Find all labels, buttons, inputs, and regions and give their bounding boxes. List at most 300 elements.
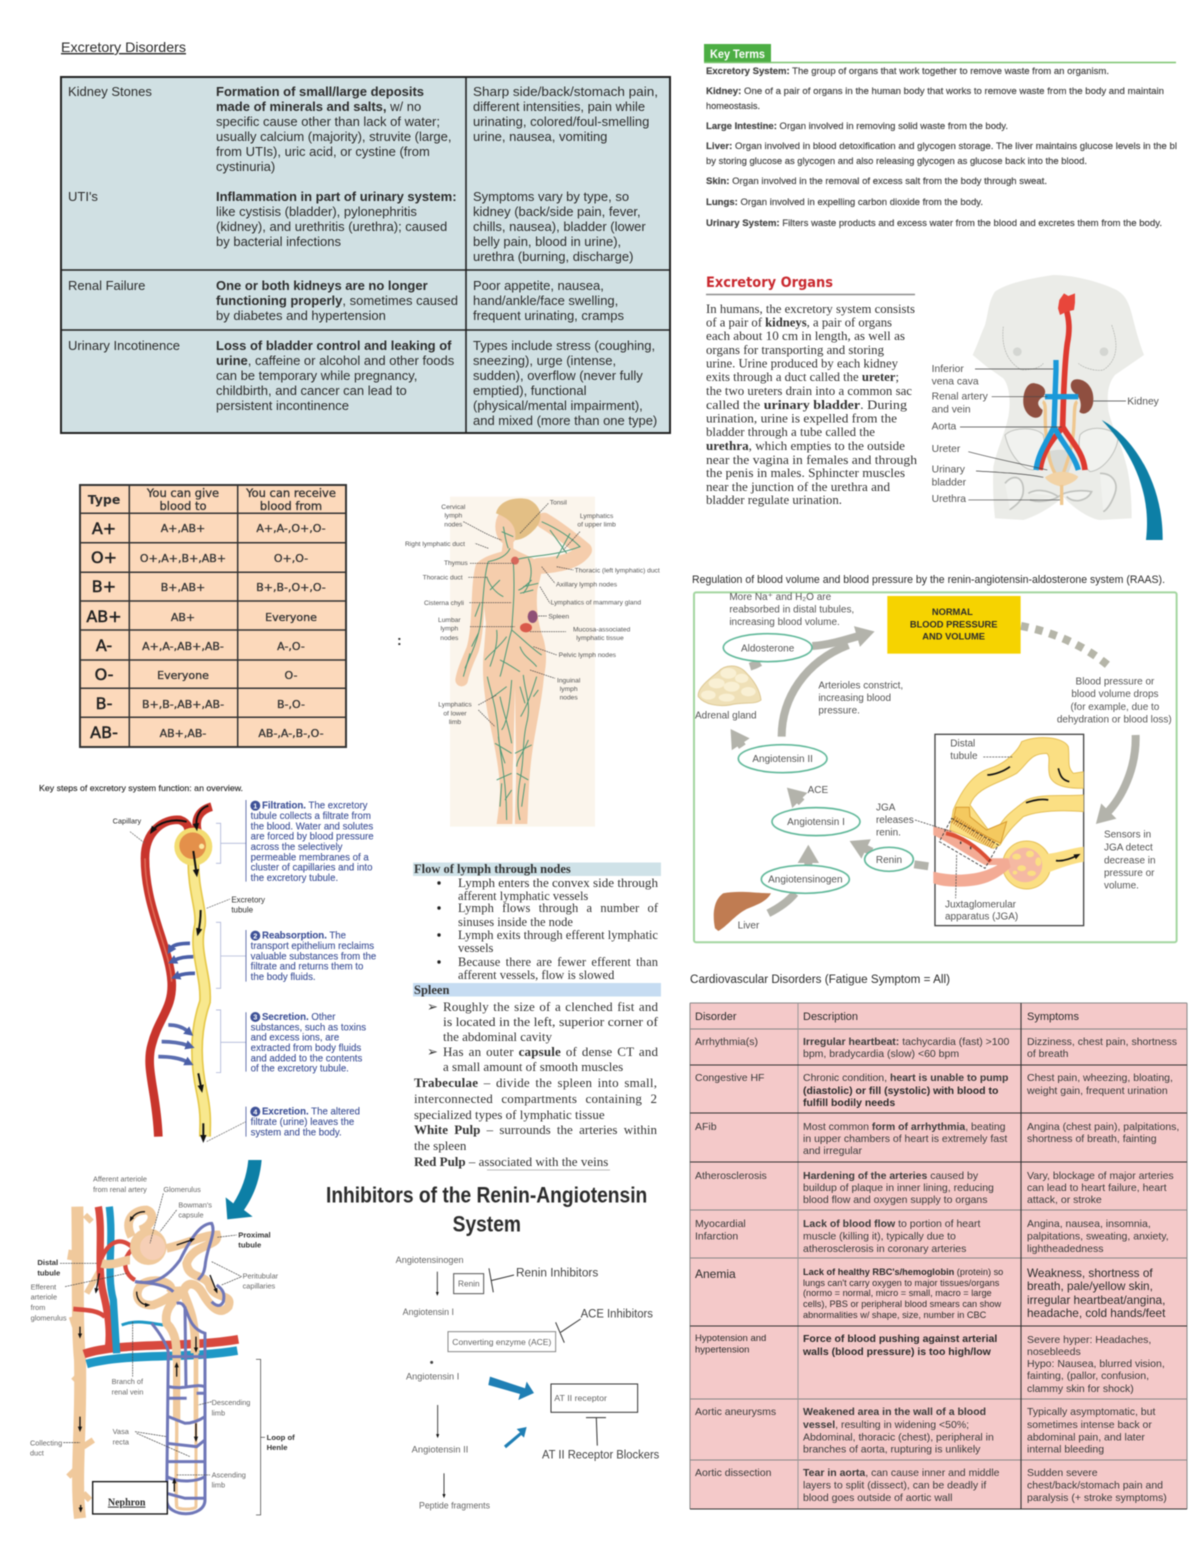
row: myocardial infarction: Lack of blood flow to portion of heart [803, 1218, 980, 1230]
row: aortic aneurysms: Weakened area in the wall of a blood [803, 1406, 986, 1418]
row: hypotension and hypertension: clammy skin for shock) [1027, 1383, 1134, 1395]
figure labels: excretory organs: Aorta [932, 421, 957, 432]
type rows: AB+,AB- [160, 727, 206, 740]
node: angiotensin I [772, 808, 860, 836]
diagram: renin-angiotensin-aldosterone system [694, 592, 1177, 942]
row: arrhythmia: bpm, bradycardia (slow) <60 bpm [803, 1048, 959, 1060]
row: aortic dissection [695, 1467, 1167, 1504]
figure: lymphatic system [405, 497, 660, 827]
aorta [1040, 308, 1085, 470]
icon: adrenal gland [698, 666, 761, 706]
text block: excretory organs paragraph: urination, urine is expelled from the [706, 412, 897, 426]
labels: Lumbar [438, 617, 461, 624]
labels [405, 500, 660, 726]
spleen text: the abdominal cavity [443, 1029, 553, 1044]
labels: Right lymphatic duct [405, 541, 465, 548]
step 1: filtration: the blood. Water and solutes [251, 821, 373, 832]
labels: Ascending [212, 1471, 246, 1480]
row: renal failure: Renal Failure [68, 278, 145, 293]
step 4: excretion [250, 1107, 360, 1138]
row: AFib: and irregular [803, 1145, 862, 1157]
AT II receptor blockers [542, 1418, 659, 1461]
row: aortic dissection: layers to split (dissect), can be deadly if [803, 1480, 986, 1492]
labels: nodes [444, 521, 463, 528]
arrow: small blue [504, 1427, 527, 1448]
step 1: filtration: are forced by blood pressure [251, 832, 374, 843]
key terms text: Skin: Organ involved in the removal of excess salt from the body through sweat. [706, 176, 1047, 187]
text block: excretory organs paragraph: bladder regulate urination. [706, 493, 842, 507]
type rows: B-,O- [277, 698, 305, 711]
stray mark: : [397, 632, 402, 648]
row: hypotension and hypertension [695, 1333, 1165, 1395]
flow of lymph bullets: Lymph exits through efferent lymphatic [458, 928, 658, 942]
hanging arm and hand [462, 567, 482, 680]
text labels: decrease in [1104, 855, 1156, 866]
node: renin: Renin [876, 855, 902, 866]
figure: excretory tubule steps [113, 800, 376, 1142]
inset: nephron juxtaglomerular apparatus: Juxtaglomerular [945, 899, 1017, 910]
step 2: reabsorption: filtrate and returns them to [251, 962, 363, 973]
type rows: B+ [92, 577, 116, 596]
row: hypotension and hypertension: hypertension [695, 1344, 749, 1356]
renin box [454, 1274, 484, 1294]
diagram: inhibitors of the renin-angiotensin system [326, 1182, 659, 1510]
labels: Branch of [112, 1377, 144, 1386]
step 1: filtration: across the selectively [251, 842, 343, 853]
step 4: excretion: filtrate (urine) leaves the [251, 1117, 354, 1128]
type rows: O- [285, 669, 297, 682]
key terms text: Large Intestine: Organ involved in removing solid waste from the body. [706, 121, 1008, 132]
labels: Cervical [441, 504, 466, 511]
secretion arrows [158, 1025, 187, 1062]
arrow: large blue [488, 1377, 534, 1400]
row: kidney stones [68, 84, 658, 174]
renin box: Renin [458, 1278, 480, 1288]
spleen text [414, 999, 659, 1169]
row: aortic aneurysms: internal bleeding [1027, 1444, 1104, 1456]
tubule [193, 862, 205, 1137]
row: urinary incontinence: childbirth, and cancer can lead to [216, 383, 407, 398]
row: aortic dissection: blood goes outside of aortic wall [803, 1492, 952, 1504]
type rows: B+,AB+ [161, 581, 205, 594]
text labels: Arterioles constrict, [818, 680, 903, 691]
step 2: reabsorption: Reabsorption. The [262, 931, 346, 942]
normal blood pressure box: BLOOD PRESSURE [910, 619, 997, 629]
hair [496, 498, 540, 540]
pathway arrows [431, 1272, 444, 1497]
labels: Mucosa-associated [573, 626, 631, 633]
text block: excretory organs paragraph: In humans, the excretory system consists [706, 302, 915, 316]
labels: Lymphatics of mammary gland [551, 600, 641, 607]
labels: Tonsil [550, 500, 567, 507]
row: urinary incontinence: urine, caffeine or alcohol and other foods [216, 353, 455, 368]
row: UTIs: (kidney), and urethritis (urethra); caused [216, 219, 447, 234]
reabsorption arrows [172, 943, 195, 976]
row: renal failure: Poor appetite, nausea, [473, 278, 604, 293]
type rows [86, 519, 326, 742]
row: myocardial infarction: palpitations, sweating, anxiety, [1027, 1230, 1169, 1242]
row: congestive HF [695, 1072, 1173, 1109]
spleen text: interconnected compartments containing 2 [414, 1091, 657, 1106]
labels: Axillary lymph nodes [556, 582, 618, 589]
text block: flow of lymph and spleen [413, 862, 661, 1169]
row: hypotension and hypertension: Force of blood pushing against arterial [803, 1333, 997, 1345]
caption: RAAS: Regulation of blood volume and blood pressure by the renin-angiotensin-aldosterone system (RAAS). [692, 574, 1165, 586]
leader lines [463, 503, 580, 727]
key terms text: Kidney: One of a pair of organs in the human body that works to remove waste from the body and maintain [706, 86, 1164, 97]
figure labels: excretory organs: Inferior [932, 364, 964, 375]
labels and leaders [130, 832, 246, 1142]
step 2: reabsorption: valuable substances from the [251, 951, 376, 962]
labels: Spleen [548, 614, 569, 621]
row: AFib: in upper chambers of heart is extremely fast [803, 1133, 1007, 1145]
row: atherosclerosis: Vary, blockage of major arteries [1027, 1170, 1174, 1182]
labels: of lower [443, 710, 467, 717]
capillary [145, 820, 188, 1137]
renin inhibitors [489, 1265, 598, 1292]
text block: excretory organs paragraph: bladder through a tube called the [706, 425, 875, 439]
flow of lymph bullets: Because there are fewer efferent than [458, 955, 659, 969]
spleen text: ➢ [427, 1044, 438, 1059]
inferior vena cava [1036, 360, 1078, 470]
row: aortic aneurysms: branches of aorta, rupturing is unlikely [803, 1444, 981, 1456]
row: myocardial infarction: Infarction [695, 1230, 738, 1242]
row: atherosclerosis: Atherosclerosis [695, 1170, 767, 1182]
step 3: secretion: Secretion. Other [262, 1012, 336, 1023]
text labels: pressure. [818, 706, 860, 717]
brackets [216, 823, 246, 1073]
AT II receptor box: AT II receptor [554, 1393, 607, 1403]
text block: excretory organs paragraph: the penis in males. Sphincter muscles [706, 466, 905, 480]
labels: limb [212, 1408, 225, 1417]
figure labels: excretory organs: Kidney [1127, 396, 1160, 407]
kidneys [1023, 379, 1093, 418]
row: kidney stones: usually calcium (majority), struvite (large, [216, 129, 452, 144]
labels: nodes [560, 695, 578, 702]
labels: Glomerulus [163, 1185, 201, 1194]
text block: excretory organs paragraph: near the junction of the urethra and [706, 480, 891, 494]
row: UTIs: Symptoms vary by type, so [473, 189, 629, 204]
flow of lymph heading [413, 862, 661, 876]
background panel [450, 497, 595, 827]
step 3: secretion: substances, such as toxins [251, 1022, 366, 1033]
row: urinary incontinence: Loss of bladder control and leaking of [216, 338, 452, 353]
row: congestive HF: fulfill bodily needs [803, 1097, 895, 1109]
AT II receptor blockers: AT II Receptor Blockers [542, 1447, 659, 1461]
lymph vessels [463, 522, 580, 820]
step 3: secretion: extracted from body fluids [251, 1043, 361, 1054]
spleen text: White Pulp – surrounds the arteries within [414, 1122, 658, 1137]
node: aldosterone [723, 634, 812, 662]
spleen text: a small amount of smooth muscles [443, 1059, 623, 1074]
labels: lymph [440, 626, 458, 633]
type rows: AB+ [171, 611, 195, 624]
flow of lymph heading: Flow of lymph through nodes [414, 862, 571, 876]
row: anemia: Lack of healthy RBC's/hemoglobin (protein) so [803, 1267, 1003, 1277]
text labels [695, 592, 1172, 931]
row: kidney stones: made of minerals and salts, w/ no [216, 99, 421, 114]
text labels: More Na⁺ and H₂O are [729, 592, 832, 603]
row: urinary incontinence [68, 338, 657, 428]
row: aortic dissection: Sudden severe [1027, 1467, 1098, 1479]
row: kidney stones: specific cause other than lack of water; [216, 114, 440, 129]
step 4: excretion: Excretion. The altered [262, 1107, 360, 1118]
vessels [73, 1207, 238, 1364]
labels: Loop of [267, 1433, 295, 1442]
row: renal failure: functioning properly, sometimes caused [216, 293, 458, 308]
title [326, 1182, 647, 1237]
text block: excretory organs paragraph: of a pair of kidneys, a pair of organs [706, 316, 892, 330]
flow arrows [152, 806, 208, 1140]
text labels: ACE [808, 785, 829, 796]
step 3: secretion: of the excretory tubule. [251, 1064, 349, 1075]
spleen text: Red Pulp – associated with the veins [414, 1154, 608, 1169]
row: hypotension and hypertension: Hypotension and [695, 1333, 766, 1344]
pathway labels [396, 1255, 490, 1510]
type rows: B+,B-,AB+,AB- [142, 698, 224, 711]
step 3: secretion: and excess ions, are [251, 1033, 339, 1044]
labels: capsule [178, 1211, 204, 1220]
labels: Henle [267, 1443, 288, 1452]
raised arm [538, 521, 584, 566]
row: aortic aneurysms: Aortic aneurysms [695, 1406, 776, 1418]
type rows: O+,A+,B+,AB+ [140, 552, 226, 565]
torso and legs [476, 540, 546, 824]
row: atherosclerosis: Hardening of the arteries caused by [803, 1170, 979, 1182]
row: aortic dissection: Tear in aorta, can cause inner and middle [803, 1467, 1000, 1479]
row: anemia: lungs can't carry oxygen to major tissues/organs [803, 1278, 1000, 1288]
table: cardiovascular disorders [690, 1003, 1187, 1509]
header row: blood to [159, 499, 207, 513]
step 3: secretion: and added to the contents [251, 1053, 362, 1064]
labels: Proximal [238, 1231, 271, 1240]
ureters [1043, 402, 1077, 473]
row: aortic aneurysms: sometimes intense back or [1027, 1419, 1152, 1431]
figure labels: excretory organs: and vein [932, 404, 971, 415]
row: urinary incontinence: sudden), overflow (never fully [473, 368, 643, 383]
figure labels: excretory organs: vena cava [932, 377, 979, 388]
type rows: A- [96, 636, 112, 655]
arrow: teal curved bottom [226, 1160, 262, 1219]
node: angiotensinogen [761, 865, 849, 893]
spleen text: Roughly the size of a clenched fist and [443, 999, 658, 1014]
row: renal failure: One or both kidneys are no longer [216, 278, 428, 293]
row: myocardial infarction: lightheadedness [1027, 1243, 1103, 1255]
pathway labels: Angiotensin I [403, 1307, 454, 1317]
nephron label box [93, 1482, 167, 1514]
header row: You can receive [245, 486, 336, 500]
row: kidney stones: Kidney Stones [68, 84, 152, 99]
title: Inhibitors of the Renin-Angiotensin [326, 1182, 647, 1207]
spleen text: specialized types of lymphatic tissue [414, 1107, 605, 1122]
row: renal failure: frequent urinating, cramps [473, 308, 625, 323]
row: UTIs: like cystisis (bladder), pylonephritis [216, 204, 417, 219]
key terms tab [704, 44, 771, 62]
gray arrows [739, 636, 1136, 913]
row: kidney stones: Sharp side/back/stomach pain, [473, 84, 658, 99]
text block: excretory organs paragraph [706, 302, 918, 507]
type rows: A+,AB+ [161, 522, 205, 535]
step 2: reabsorption [250, 931, 376, 983]
converting enzyme box: Converting enzyme (ACE) [452, 1337, 552, 1347]
figure labels: excretory organs [932, 364, 1160, 505]
row: urinary incontinence: and mixed (more than one type) [473, 413, 657, 428]
flow of lymph bullets: vessels [458, 941, 494, 955]
row: anemia: headache, cold hands/feet [1027, 1306, 1166, 1320]
row: kidney stones: cystinuria) [216, 159, 275, 174]
text labels: Liver [738, 920, 760, 931]
text labels: JGA detect [1104, 843, 1153, 854]
row: aortic aneurysms: Typically asymptomatic, but [1027, 1406, 1155, 1418]
type rows: O+ [91, 548, 117, 567]
labels [30, 1175, 295, 1490]
torso silhouette [973, 275, 1144, 520]
heading: cardiovascular disorders: Cardiovascular Disorders (Fatigue Symptom = All) [690, 974, 950, 986]
labels: Thoracic duct [423, 574, 463, 581]
heading: Excretory Organs: Excretory Organs [706, 275, 833, 291]
spleen text: the spleen [414, 1138, 467, 1153]
row: kidney stones: from UTIs), uric acid, or cystine (from [216, 144, 430, 159]
step 1: filtration: permeable membranes of a [251, 852, 369, 863]
row: urinary incontinence: Types include stress (coughing, [473, 338, 655, 353]
labels: limb [449, 719, 461, 726]
text labels: Sensors in [1104, 830, 1151, 841]
row: anemia: breath, pale/yellow skin, [1027, 1279, 1153, 1293]
spleen text: Has an outer capsule of dense CT and [443, 1044, 658, 1059]
type rows: A+,A-,AB+,AB- [142, 640, 224, 653]
header row [695, 1011, 1079, 1023]
header row: Disorder [695, 1011, 737, 1023]
heading: Excretory Disorders: Excretory Disorders [61, 39, 186, 55]
normal blood pressure box: NORMAL [932, 607, 973, 617]
text labels: JGA [876, 802, 896, 813]
text labels: blood volume drops [1071, 689, 1159, 700]
labels: lymph [444, 513, 462, 520]
labels: glomerulus [31, 1314, 67, 1323]
figure labels: excretory organs: Urinary [932, 464, 966, 476]
text block: excretory organs paragraph: near the vagina in females and through [706, 453, 918, 467]
key terms text: Excretory System: The group of organs that work together to remove waste from an organism. [706, 66, 1109, 77]
key terms text: Liver: Organ involved in blood detoxification and glycogen storage. The liver maintains glucose levels in the bl [706, 141, 1177, 152]
labels: Bowman's [178, 1201, 212, 1210]
row: aortic aneurysms: vessel, resulting in widening <50%; [803, 1419, 969, 1431]
spleen text: ➢ [427, 999, 438, 1014]
type rows: A-,O- [277, 640, 305, 653]
key terms text: by storing glucose as glycogen and also releasing glycogen as glucose back into the blood. [706, 156, 1087, 167]
labels: lymphatic tissue [576, 635, 624, 642]
row: urinary incontinence: persistent incontinence [216, 398, 349, 413]
row: hypotension and hypertension: Severe hyper: Headaches, [1027, 1334, 1151, 1346]
glomerulus [130, 1228, 167, 1265]
text block: excretory organs paragraph: urine. Urine produced by each kidney [706, 356, 899, 370]
text block: excretory organs paragraph: organs for transporting and storing [706, 343, 885, 357]
row: hypotension and hypertension: Hypo: Nausea, blurred vision, [1027, 1358, 1165, 1370]
row: myocardial infarction: muscle (killing it), typically due to [803, 1230, 956, 1242]
row: anemia: cells), PBS or peripheral blood smears can show [803, 1299, 1001, 1309]
labels: Lymphatics [438, 702, 472, 709]
row: hypotension and hypertension: walls (blood pressure) is too high/low [802, 1346, 992, 1358]
step 2: reabsorption: transport epithelium reclaims [251, 941, 374, 952]
row: hypotension and hypertension: nosebleeds [1027, 1346, 1081, 1358]
step 3: secretion [250, 1012, 366, 1075]
node: aldosterone: Aldosterone [741, 643, 795, 654]
leader lines [960, 369, 1126, 500]
row: myocardial infarction: Angina, nausea, insomnia, [1027, 1218, 1151, 1230]
row: arrhythmia: of breath [1027, 1048, 1069, 1060]
row: UTIs: urethra (burning, discharge) [473, 249, 633, 264]
row: urinary incontinence: can be temporary while pregnancy, [216, 368, 417, 383]
row: atherosclerosis: can lead to heart failure, heart [1027, 1182, 1167, 1194]
text labels: reabsorbed in distal tubules, [729, 604, 854, 615]
row: kidney stones: urinating, colored/foul-smelling [473, 114, 649, 129]
row: anemia: irregular heartbeat/angina, [1027, 1293, 1165, 1307]
step 2: reabsorption: the body fluids. [251, 972, 316, 983]
loop bracket [256, 1359, 265, 1515]
type rows: O+,O- [274, 552, 308, 565]
node: angiotensin II: Angiotensin II [752, 754, 813, 765]
text block: excretory organs paragraph: urethra, which empties to the outside [706, 439, 905, 453]
text labels: increasing blood [818, 693, 891, 704]
row: congestive HF: Chronic condition, heart is unable to pump [803, 1072, 1008, 1084]
labels: Descending [212, 1398, 250, 1407]
row: anemia: Anemia [695, 1267, 736, 1281]
row: renal failure [68, 278, 625, 323]
text labels: renin. [876, 827, 901, 838]
table: blood types [80, 485, 346, 747]
leader lines [60, 1193, 242, 1475]
labels: nodes [440, 635, 459, 642]
labels: Peritubular [243, 1271, 279, 1280]
key terms text [706, 66, 1177, 229]
type rows: A+,A-,O+,O- [256, 522, 326, 535]
spleen heading [413, 983, 661, 997]
row: UTIs: belly pain, blood in urine), [473, 234, 621, 249]
renin inhibitors: Renin Inhibitors [516, 1265, 598, 1279]
title: System [453, 1212, 521, 1237]
type rows: O- [95, 665, 113, 684]
text labels: releases [876, 815, 914, 826]
labels: duct [30, 1449, 44, 1458]
figure labels: excretory organs: Ureter [932, 444, 961, 455]
row: congestive HF: Chest pain, wheezing, bloating, [1027, 1072, 1173, 1084]
labels: Pelvic lymph nodes [559, 652, 617, 659]
spleen and thymus [511, 557, 519, 565]
type rows: B+,B-,O+,O- [256, 581, 326, 594]
inset: nephron juxtaglomerular apparatus [915, 734, 1085, 926]
labels: recta [113, 1437, 130, 1446]
row: congestive HF: weight gain, frequent urination [1026, 1085, 1168, 1097]
type rows: Everyone [265, 611, 317, 624]
node: angiotensin I: Angiotensin I [787, 817, 845, 828]
labels: capillaries [243, 1281, 276, 1290]
pathway labels: Peptide fragments [419, 1500, 490, 1510]
row: arrhythmia: Dizziness, chest pain, shortness [1027, 1036, 1177, 1048]
row: AFib: Most common form of arrhythmia, beating [803, 1121, 1006, 1133]
frame [694, 592, 1177, 942]
figure: nephron [30, 1175, 295, 1518]
row: urinary incontinence: emptied), functional [473, 383, 587, 398]
inset: nephron juxtaglomerular apparatus: Distal [950, 738, 975, 749]
flow of lymph bullets: Lymph enters the convex side through [458, 876, 659, 890]
pathway labels: Angiotensinogen [396, 1255, 464, 1265]
row: aortic aneurysms: abdominal pain, and later [1027, 1432, 1145, 1444]
row: arrhythmia: Irregular heartbeat: tachycardia (fast) >100 [803, 1036, 1009, 1048]
caption: excretory function overview: Key steps of excretory system function: an overview. [39, 783, 243, 793]
key terms text: homeostasis. [706, 101, 760, 112]
row: myocardial infarction: atherosclerosis in coronary arteries [803, 1243, 966, 1255]
labels: Lymphatics [580, 513, 614, 520]
labels: Afferent arteriole [93, 1175, 147, 1184]
